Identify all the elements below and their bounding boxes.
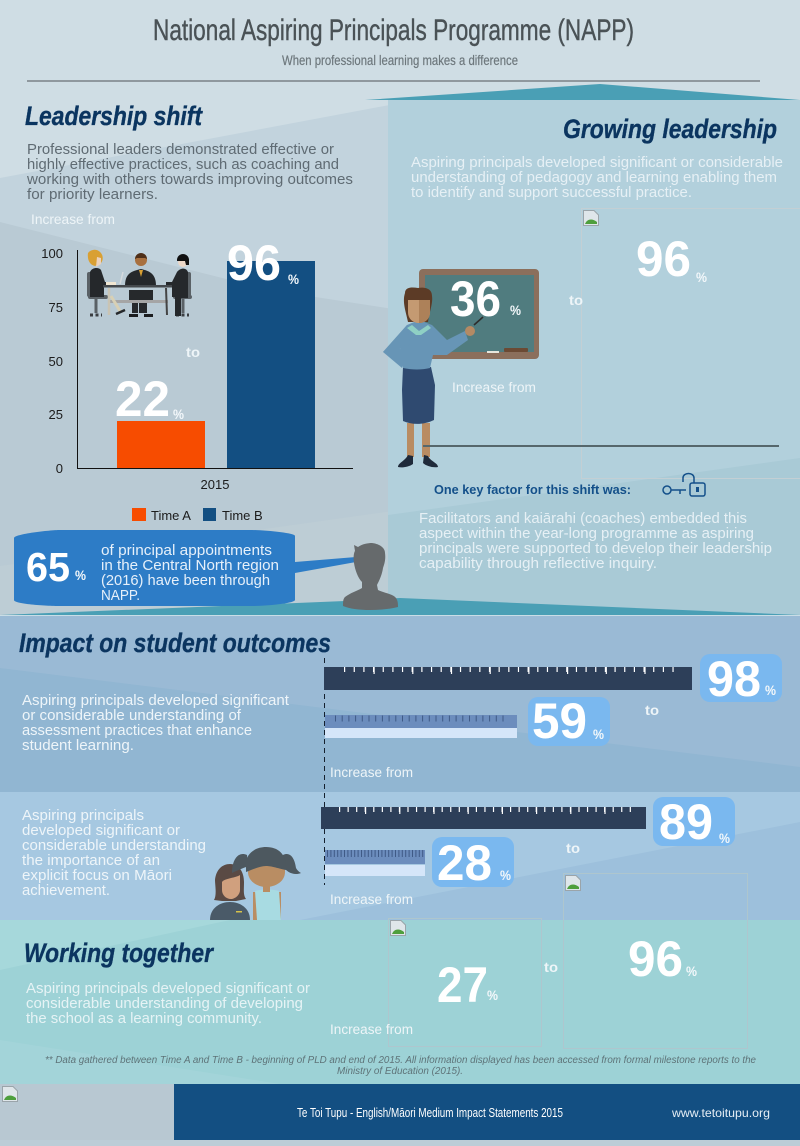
icon: chalkboard bbox=[419, 269, 539, 359]
baseline bbox=[423, 445, 779, 447]
text: growing leadership description: to identify and support successful practice. bbox=[411, 185, 692, 201]
footnote bbox=[45, 1055, 756, 1077]
badge: 89%: % bbox=[719, 830, 730, 846]
label: increase from: Increase from bbox=[330, 892, 413, 907]
value: 27%: 27 bbox=[437, 957, 488, 1013]
bar chart: 75 bbox=[49, 300, 63, 315]
bottom strip bbox=[0, 1140, 800, 1146]
bar chart bbox=[41, 246, 353, 523]
heading: leadership shift: Leadership shift bbox=[25, 101, 203, 131]
badge: 28%: % bbox=[500, 867, 511, 883]
text: assessment practices: Aspiring principals developed significant bbox=[22, 693, 289, 709]
panel: growing leadership background bbox=[0, 84, 800, 616]
label: increase from: Increase from bbox=[330, 765, 413, 780]
text: Māori achievement: considerable understanding bbox=[22, 838, 206, 854]
text: key factor description: Facilitators and kaiārahi (coaches) embedded this bbox=[419, 511, 747, 527]
heading: impact on student outcomes: Impact on student outcomes bbox=[19, 628, 331, 658]
bar chart: 2015 bbox=[201, 477, 229, 492]
broken image placeholder: working together right bbox=[564, 874, 748, 1048]
label: to: to bbox=[186, 344, 200, 360]
label: to: to bbox=[569, 292, 583, 308]
icon: person silhouette bbox=[343, 543, 398, 610]
footnote: Ministry of Education (2015). bbox=[337, 1066, 463, 1077]
text: Māori achievement: explicit focus on Māori bbox=[22, 868, 172, 884]
footnote: ** Data gathered between Time A and Time B - beginning of PLD and end of 2015. All information displayed has been accessed from formal milestone reports to the bbox=[45, 1055, 756, 1066]
bar chart: Time B bbox=[222, 508, 263, 523]
value: 36%: 36 bbox=[450, 271, 501, 327]
broken image placeholder: working together left bbox=[388, 918, 542, 1046]
text: key factor description: capability through reflective inquiry. bbox=[419, 556, 657, 572]
icon: teacher bbox=[383, 288, 483, 467]
badge: 59%: 59 bbox=[532, 693, 587, 749]
text: one key factor: One key factor for this shift was: bbox=[434, 482, 631, 497]
text: working together description: Aspiring principals developed significant or bbox=[26, 981, 310, 997]
text: growing leadership description bbox=[411, 155, 783, 201]
text: leadership shift description bbox=[26, 142, 353, 203]
value: 96%: % bbox=[288, 271, 299, 287]
callout: 65% of principal appointments: 65 bbox=[26, 544, 70, 590]
text: Māori achievement: the importance of an bbox=[22, 853, 160, 869]
value: 27%: % bbox=[487, 987, 498, 1003]
text: Māori achievement: developed significant or bbox=[22, 823, 180, 839]
text: leadership shift description: highly effective practices, such as coaching and bbox=[27, 157, 339, 173]
icon: key and lock bbox=[663, 474, 705, 496]
text: assessment practices bbox=[22, 693, 289, 754]
text: growing leadership description: Aspiring principals developed significant or considerable bbox=[411, 155, 783, 171]
text: working together description: the school as a learning community. bbox=[26, 1011, 262, 1027]
footer bbox=[0, 1084, 800, 1140]
callout: 65% of principal appointments bbox=[14, 530, 356, 606]
label: increase from: Increase from bbox=[330, 1022, 413, 1037]
icon: meeting table bbox=[87, 250, 192, 317]
text: Māori achievement: Aspiring principals bbox=[22, 808, 144, 824]
ruler bar: 59 bbox=[325, 715, 517, 738]
callout: 65% of principal appointments: % bbox=[75, 567, 86, 583]
broken image placeholder: growing leadership bbox=[582, 208, 800, 478]
callout: 65% of principal appointments: (2016) have been through bbox=[101, 573, 270, 589]
panel: impact on student outcomes background bbox=[0, 615, 800, 792]
label: increase from: Increase from bbox=[452, 380, 536, 395]
text: leadership shift description: Professional leaders demonstrated effective or bbox=[27, 142, 334, 158]
text: working together description: considerable understanding of developing bbox=[26, 996, 303, 1012]
value: 22%: 22 bbox=[115, 371, 170, 427]
badge: 59% bbox=[528, 693, 610, 749]
bar chart: 0 bbox=[56, 461, 63, 476]
label: increase from: Increase from bbox=[31, 212, 115, 227]
label: to: to bbox=[544, 959, 558, 975]
footer: www.tetoitupu.org bbox=[671, 1106, 770, 1120]
value: 96%: 96 bbox=[227, 235, 281, 291]
footer: Te Toi Tupu - English/Māori Medium Impact Statements 2015 bbox=[297, 1105, 563, 1120]
text: assessment practices: assessment practices that enhance bbox=[22, 723, 252, 739]
title bbox=[27, 14, 760, 82]
panel: Māori achievement background bbox=[0, 792, 800, 920]
label: to: to bbox=[566, 840, 580, 856]
text: key factor description: aspect within the year-long programme as aspiring bbox=[419, 526, 754, 542]
text: growing leadership description: understanding of pedagogy and learning enabling them bbox=[411, 170, 777, 186]
value: 96% working together: 96 bbox=[628, 931, 683, 987]
bar chart: 25 bbox=[49, 407, 63, 422]
value: 96% growing leadership: 96 bbox=[636, 231, 691, 287]
text: leadership shift description: working with others towards improving outcomes bbox=[26, 172, 353, 188]
bar chart: 100 bbox=[41, 246, 63, 261]
dashed reference line bbox=[324, 658, 326, 885]
badge: 89% bbox=[653, 794, 735, 850]
heading: working together: Working together bbox=[24, 938, 214, 968]
title: National Aspiring Principals Programme (NAPP) bbox=[153, 14, 634, 47]
icon: two children bbox=[210, 847, 301, 920]
value: 36%: % bbox=[510, 302, 521, 318]
callout: 65% of principal appointments: NAPP. bbox=[101, 588, 140, 604]
text: key factor description bbox=[419, 511, 772, 572]
text: assessment practices: or considerable understanding of bbox=[22, 708, 242, 724]
badge: 59%: % bbox=[593, 726, 604, 742]
title: When professional learning makes a difference bbox=[282, 52, 518, 68]
ruler bar: 98 bbox=[324, 667, 692, 690]
text: leadership shift description: for priority learners. bbox=[27, 187, 158, 203]
callout: 65% of principal appointments: of principal appointments bbox=[101, 543, 272, 559]
ruler bar: 89 bbox=[321, 807, 646, 829]
bar chart: Time A bbox=[151, 508, 191, 523]
callout: 65% of principal appointments: in the Central North region bbox=[101, 558, 279, 574]
badge: 98% bbox=[700, 651, 782, 707]
text: key factor description: principals were supported to develop their leadership bbox=[419, 541, 772, 557]
badge: 98%: % bbox=[765, 682, 776, 698]
value: 96% working together: % bbox=[686, 963, 697, 979]
text: Māori achievement bbox=[22, 808, 206, 899]
value: 22%: % bbox=[173, 406, 184, 422]
badge: 28%: 28 bbox=[437, 835, 492, 891]
badge: 98%: 98 bbox=[707, 651, 761, 707]
text: Māori achievement: achievement. bbox=[22, 883, 110, 899]
ruler bar: 28 bbox=[325, 850, 425, 876]
value: 96% growing leadership: % bbox=[696, 269, 707, 285]
badge: 89%: 89 bbox=[659, 794, 713, 850]
text: working together description bbox=[26, 981, 310, 1027]
panel: working together background bbox=[0, 920, 800, 1084]
label: to: to bbox=[645, 702, 659, 718]
badge: 28% bbox=[432, 835, 514, 891]
text: assessment practices: student learning. bbox=[22, 738, 134, 754]
bar chart: 50 bbox=[49, 354, 63, 369]
